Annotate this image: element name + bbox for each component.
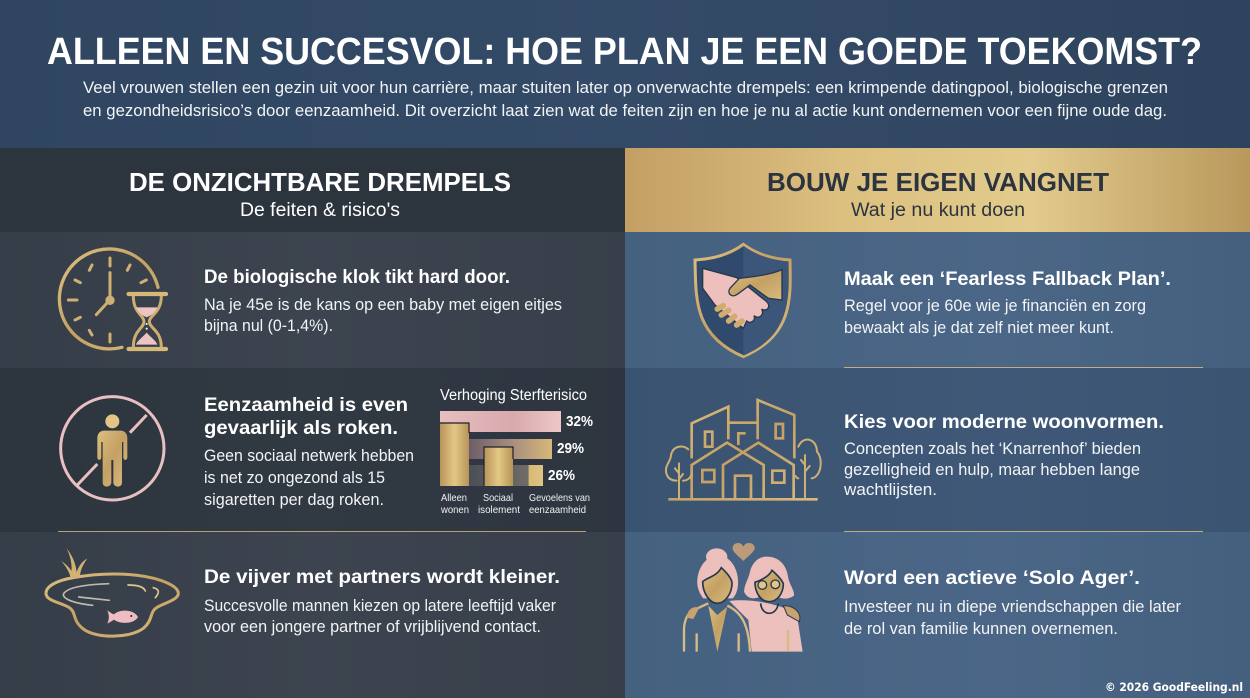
text: fearless fallback plan: Regel voor je 60e wie je financiën en zorg xyxy=(844,297,1146,315)
text: biologische klok: Na je 45e is de kans op een baby met eigen eitjes xyxy=(204,296,562,314)
category labels xyxy=(440,492,590,516)
title: ALLEEN EN SUCCESVOL: HOE PLAN JE EEN GOEDE TOEKOMST? xyxy=(47,31,1202,73)
panel: de onzichtbare drempels xyxy=(0,148,625,698)
left column header: De feiten & risico's xyxy=(240,200,400,221)
text: eenzaamheid: is net zo ongezond als 15 xyxy=(204,469,385,487)
text: fearless fallback plan xyxy=(844,268,1171,337)
text: fearless fallback plan: Maak een ‘Fearless Fallback Plan’. xyxy=(844,268,1171,290)
icon: shield with handshake xyxy=(695,244,790,357)
chart title: Verhoging Sterfterisico xyxy=(440,387,587,404)
vertical bars xyxy=(440,423,513,486)
text: vijver: De vijver met partners wordt kleiner. xyxy=(204,566,560,588)
text: moderne woonvormen: wachtlijsten. xyxy=(843,481,937,499)
category labels: Alleen xyxy=(441,492,467,504)
horizontal bars xyxy=(440,411,561,486)
header band xyxy=(0,0,1250,148)
text: solo ager: de rol van familie kunnen overnemen. xyxy=(844,620,1118,638)
icon: clock and hourglass xyxy=(59,249,166,349)
category labels: wonen xyxy=(440,504,469,516)
value labels: 29% xyxy=(557,440,584,457)
category labels: Gevoelens van xyxy=(529,492,590,504)
category labels: isolement xyxy=(478,504,520,516)
text: solo ager: Investeer nu in diepe vriendschappen die later xyxy=(844,598,1181,616)
text: vijver: voor een jongere partner of vrijblijvend contact. xyxy=(204,618,541,636)
text: fearless fallback plan: bewaakt als je dat zelf niet meer kunt. xyxy=(844,319,1114,337)
text: moderne woonvormen: Concepten zoals het ‘Knarrenhof’ bieden xyxy=(844,440,1141,458)
text: solo ager: Word een actieve ‘Solo Ager’. xyxy=(844,567,1140,589)
bar chart: verhoging sterfterisico xyxy=(440,387,593,516)
category labels: Sociaal xyxy=(483,492,513,504)
text: moderne woonvormen xyxy=(843,411,1164,499)
text: moderne woonvormen: gezelligheid en hulp, maar hebben lange xyxy=(844,461,1140,479)
text: biologische klok: bijna nul (0-1,4%). xyxy=(204,317,333,335)
text: eenzaamheid xyxy=(204,394,414,509)
text: eenzaamheid: gevaarlijk als roken. xyxy=(204,417,398,439)
text: eenzaamheid: Eenzaamheid is even xyxy=(204,394,408,416)
value labels: 32% xyxy=(566,413,593,430)
text: solo ager xyxy=(844,567,1181,638)
text: vijver xyxy=(204,566,560,636)
intro text xyxy=(83,79,1168,120)
icon: two friends with heart xyxy=(684,543,803,652)
intro text: en gezondheidsrisico’s door eenzaamheid. Dit overzicht laat zien wat de feiten zijn en hoe je nu al actie kunt ondernemen voor een fijne oude dag. xyxy=(83,102,1167,120)
value labels xyxy=(548,413,593,484)
value labels: 26% xyxy=(548,467,575,484)
text: vijver: Succesvolle mannen kiezen op latere leeftijd vaker xyxy=(204,597,556,615)
text: biologische klok xyxy=(204,266,562,335)
right column header xyxy=(625,148,1250,232)
panel: bouw je eigen vangnet xyxy=(625,148,1250,698)
icon: person in prohibition sign xyxy=(61,397,164,500)
text: moderne woonvormen: Kies voor moderne woonvormen. xyxy=(844,411,1164,433)
text: biologische klok: De biologische klok tikt hard door. xyxy=(204,266,510,288)
right column header: BOUW JE EIGEN VANGNET xyxy=(767,167,1109,197)
category labels: eenzaamheid xyxy=(529,504,586,516)
text: eenzaamheid: Geen sociaal netwerk hebben xyxy=(204,447,414,465)
icon: pond with fish xyxy=(46,548,178,636)
left column header: DE ONZICHTBARE DREMPELS xyxy=(129,167,511,197)
icon: houses and trees xyxy=(666,400,821,499)
left column header xyxy=(0,148,625,232)
copyright: © 2026 GoodFeeling.nl xyxy=(1105,680,1243,694)
text: eenzaamheid: sigaretten per dag roken. xyxy=(204,491,384,509)
right column header: Wat je nu kunt doen xyxy=(851,200,1025,221)
intro text: Veel vrouwen stellen een gezin uit voor hun carrière, maar stuiten later op onverwachte drempels: een krimpende datingpool, biologische grenzen xyxy=(83,79,1168,97)
